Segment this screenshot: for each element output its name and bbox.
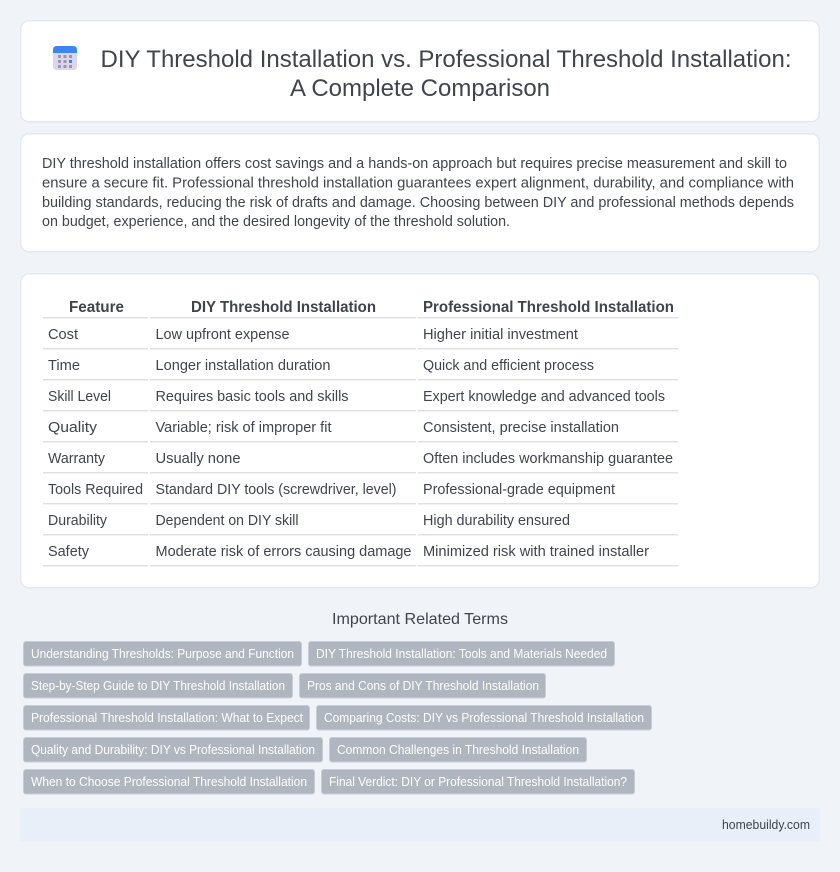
text block: intro paragraph: DIY threshold installation offers cost savings and a hands-on approach but requires precise measurement and skill to <box>42 156 787 172</box>
table row: durability <box>48 513 570 529</box>
tag <box>330 738 586 762</box>
table row: skill level: Expert knowledge and advanced tools <box>423 389 665 405</box>
table row: quality: Quality <box>48 420 98 436</box>
table row: tools required: Standard DIY tools (screwdriver, level) <box>156 482 396 498</box>
table row: safety: Safety <box>48 544 90 560</box>
tag <box>300 674 546 698</box>
panel: title <box>21 21 819 122</box>
table row: tools required: Tools Required <box>48 482 143 498</box>
tag: Comparing Costs: DIY vs Professional Threshold Installation <box>324 711 644 725</box>
table row: cost <box>48 327 578 343</box>
tag <box>316 706 652 730</box>
heading: related terms: Important Related Terms <box>332 611 508 628</box>
tag: DIY Threshold Installation: Tools and Materials Needed <box>316 647 607 661</box>
table header: Professional Threshold Installation <box>423 299 674 316</box>
tag: Understanding Thresholds: Purpose and Function <box>31 647 294 661</box>
table row: safety <box>48 544 649 560</box>
table row: safety: Moderate risk of errors causing damage <box>156 544 412 560</box>
table row: durability: Dependent on DIY skill <box>156 513 298 529</box>
table row: quality: Variable; risk of improper fit <box>156 420 332 436</box>
tag <box>308 642 614 666</box>
tag: Common Challenges in Threshold Installation <box>337 743 579 757</box>
table row: cost: Cost <box>48 327 78 343</box>
text block: intro paragraph: ensure a secure fit. Professional threshold installation guarantees expert alignment, durability, and compliance with <box>42 176 794 192</box>
text block: intro paragraph: on budget, experience, and the desired longevity of the threshold solution. <box>42 214 510 230</box>
table row: skill level: Skill Level <box>48 389 111 405</box>
table row: skill level <box>48 389 665 405</box>
tag <box>24 674 292 698</box>
tag <box>24 642 302 666</box>
table row: warranty: Warranty <box>48 451 106 467</box>
heading: A Complete Comparison <box>290 75 550 102</box>
table row: cost: Higher initial investment <box>423 327 578 343</box>
tag list: related terms <box>24 642 652 794</box>
panel: introduction <box>21 134 819 252</box>
icon: calendar <box>53 46 77 70</box>
tag: Quality and Durability: DIY vs Professional Installation <box>31 743 315 757</box>
text block: intro paragraph <box>42 156 794 230</box>
tag <box>322 770 634 794</box>
tag: Step-by-Step Guide to DIY Threshold Installation <box>31 679 285 693</box>
table row: durability: Durability <box>48 513 108 529</box>
table row: time: Longer installation duration <box>156 358 330 374</box>
table row: time: Quick and efficient process <box>423 358 594 374</box>
table header: DIY Threshold Installation <box>191 299 376 316</box>
table row: warranty <box>48 451 673 467</box>
footer <box>20 808 820 842</box>
tag <box>24 770 314 794</box>
tag: Final Verdict: DIY or Professional Threshold Installation? <box>329 775 627 789</box>
table row: time: Time <box>48 358 80 374</box>
table row: quality <box>48 420 619 436</box>
tag: Professional Threshold Installation: What to Expect <box>31 711 304 725</box>
table row: tools required: Professional-grade equipment <box>423 482 615 498</box>
table header <box>69 299 674 316</box>
table row: warranty: Usually none <box>156 451 240 467</box>
tag <box>24 706 310 730</box>
tag: When to Choose Professional Threshold Installation <box>31 775 307 789</box>
table row: time <box>48 358 594 374</box>
heading <box>100 46 792 102</box>
text block: intro paragraph: building standards, reducing the risk of drafts and damage. Choosing between DIY and professional methods depends <box>42 195 794 211</box>
footer: homebuildy.com <box>722 818 810 832</box>
table row: skill level: Requires basic tools and skills <box>156 389 348 405</box>
table row: safety: Minimized risk with trained installer <box>423 544 649 560</box>
table row: quality: Consistent, precise installation <box>423 420 619 436</box>
tag <box>24 738 322 762</box>
table row: warranty: Often includes workmanship guarantee <box>423 451 673 467</box>
table row: durability: High durability ensured <box>423 513 570 529</box>
panel: comparison table <box>21 274 819 588</box>
table row: tools required <box>48 482 615 498</box>
tag: Pros and Cons of DIY Threshold Installation <box>307 679 539 693</box>
heading: DIY Threshold Installation vs. Professional Threshold Installation: <box>100 46 792 73</box>
table row: cost: Low upfront expense <box>156 327 290 343</box>
table header: Feature <box>69 299 124 316</box>
